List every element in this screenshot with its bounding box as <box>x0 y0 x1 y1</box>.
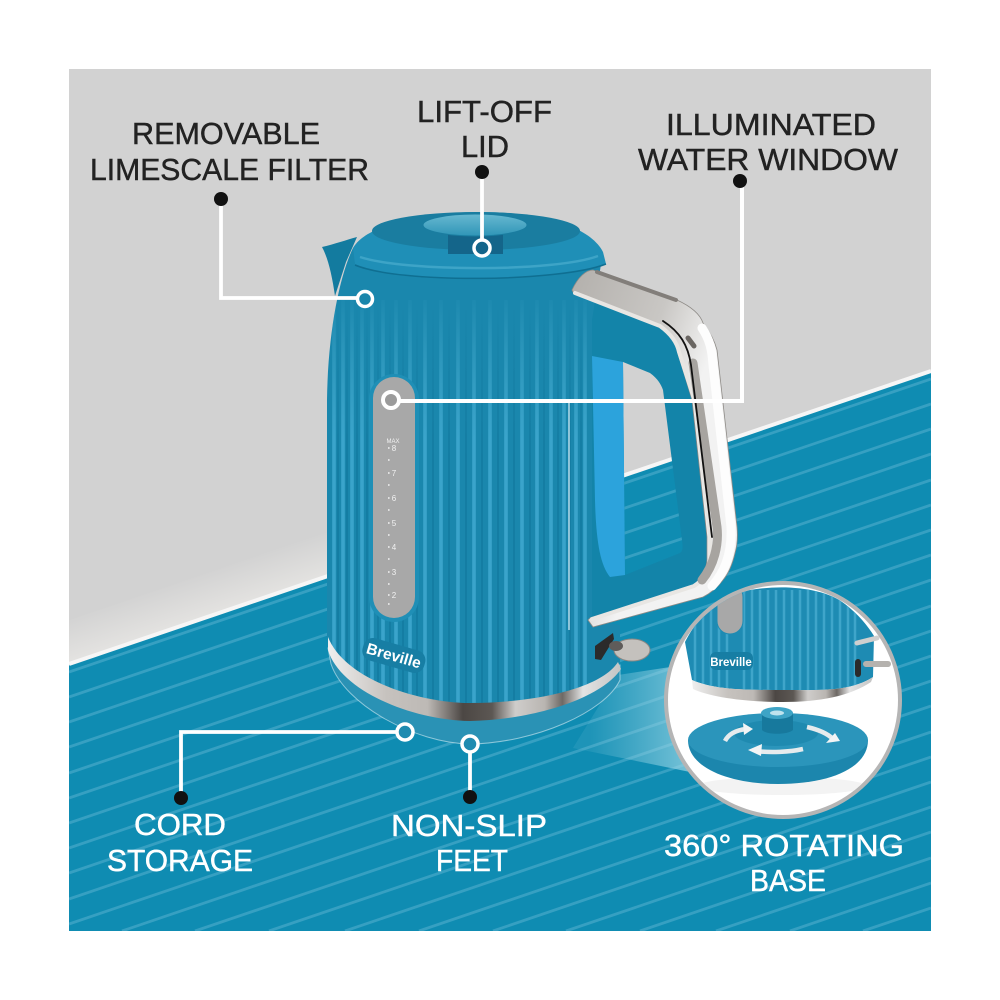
water window <box>369 374 419 622</box>
inset circle: rotating base detail <box>666 583 900 817</box>
inset logo <box>710 652 753 670</box>
label: lift-off lid: LIFT-OFF <box>417 94 552 129</box>
kettle light side strip <box>592 356 625 577</box>
panel: grey wall background <box>69 69 931 931</box>
label: removable limescale filter <box>90 116 369 187</box>
water window: 7 <box>392 469 397 478</box>
inset chrome ring <box>692 677 873 702</box>
inset base disc top <box>688 713 868 767</box>
water window: 8 <box>392 444 397 453</box>
rotation arrows <box>725 727 833 752</box>
lid knob <box>423 214 527 236</box>
label: removable limescale filter: REMOVABLE <box>132 116 320 151</box>
inset logo: Breville <box>710 657 752 669</box>
water window: 4 <box>392 543 397 552</box>
label: 360 rotating base <box>664 828 904 898</box>
infographic canvas <box>69 69 931 931</box>
kettle handle chrome <box>572 270 737 627</box>
kettle ribs <box>334 300 585 710</box>
label: non-slip feet: NON-SLIP <box>391 808 547 843</box>
lid stem <box>448 230 503 254</box>
label: 360 rotating base: BASE <box>750 863 826 898</box>
water window: MAX <box>386 439 400 445</box>
inset base disc side <box>688 740 868 784</box>
inset base shadow <box>704 778 862 795</box>
label: 360 rotating base: 360° ROTATING <box>664 828 904 863</box>
wall glow near floor <box>69 531 330 665</box>
water window: 3 <box>392 568 397 577</box>
kettle handle blue grip <box>573 292 707 618</box>
lid rim shadow <box>355 264 606 278</box>
label: illuminated water window <box>638 107 899 177</box>
handle chrome highlights <box>575 272 731 619</box>
panel: teal striped floor <box>69 371 931 931</box>
label: cord storage: STORAGE <box>107 843 253 878</box>
label: lift-off lid: LID <box>461 129 509 164</box>
inset handle and switch <box>857 638 888 674</box>
callout: lift-off lid <box>474 165 490 256</box>
label: cord storage <box>107 807 253 878</box>
rotation arrow heads <box>743 723 840 756</box>
callout: non-slip feet <box>462 736 478 804</box>
kettle illustration <box>322 212 737 744</box>
chrome ring <box>328 637 621 721</box>
label: removable limescale filter: LIMESCALE FILTER <box>90 152 369 187</box>
water window: 2 <box>392 591 397 600</box>
label: non-slip feet: FEET <box>436 843 508 878</box>
logo: Breville: Breville <box>364 641 423 672</box>
light beam from kettle base to inset <box>573 664 690 772</box>
callout: limescale filter <box>214 192 372 306</box>
label: illuminated water window: WATER WINDOW <box>638 142 899 177</box>
lid recess <box>372 212 580 250</box>
lid highlight <box>360 256 598 268</box>
kettle body <box>327 248 620 703</box>
callout: cord storage <box>174 724 413 805</box>
logo: Breville <box>360 636 428 675</box>
inset kettle body <box>685 587 874 690</box>
inset ribs <box>694 590 856 690</box>
label: non-slip feet <box>391 808 547 878</box>
label: lift-off lid <box>417 94 552 164</box>
label: illuminated water window: ILLUMINATED <box>666 107 876 142</box>
inset base stem <box>761 707 793 734</box>
kettle lid <box>353 212 606 279</box>
callout: water window <box>383 174 747 408</box>
kettle base <box>328 648 620 744</box>
inset base inner ring <box>734 720 818 746</box>
water window: 6 <box>392 494 397 503</box>
water window: 5 <box>392 519 397 528</box>
boil switch <box>595 633 650 661</box>
label: cord storage: CORD <box>134 807 226 842</box>
kettle spout <box>322 237 357 296</box>
